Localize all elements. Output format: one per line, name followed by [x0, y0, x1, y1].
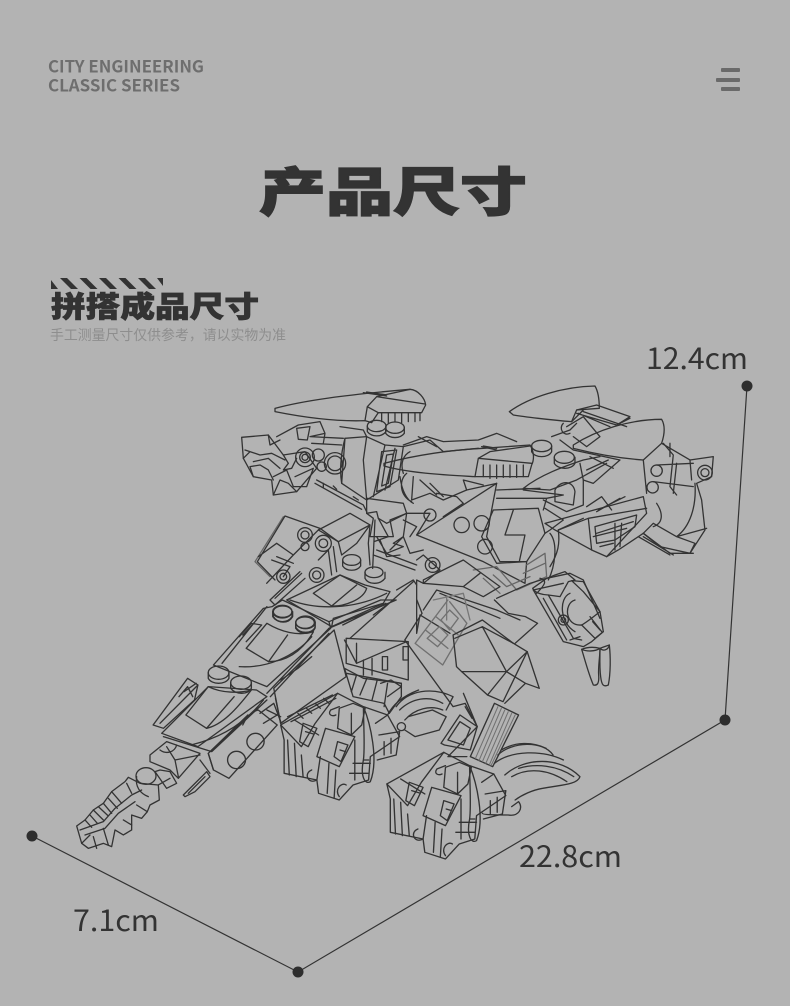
section note: 手工测量尺寸仅供参考，请以实物为准 — [50, 325, 286, 345]
lower body: wedges and legs — [153, 600, 580, 859]
right body block — [545, 497, 693, 567]
center head — [367, 445, 533, 557]
upper body: heads and shoulders — [242, 386, 713, 620]
title: 产品尺寸 — [259, 151, 527, 226]
right heads — [509, 386, 713, 555]
label: length: 22.8cm — [519, 834, 622, 876]
right arm and claws — [533, 572, 610, 686]
series label — [48, 54, 204, 96]
series label: CLASSIC SERIES — [48, 72, 180, 96]
torso blocks — [405, 600, 539, 757]
shoulder panel — [255, 516, 338, 583]
ribbed plate — [470, 703, 519, 767]
icon: menu — [716, 68, 740, 91]
top wedge — [270, 513, 388, 605]
neck plates — [213, 600, 396, 687]
dimension lines — [26, 380, 752, 978]
robot line drawing — [77, 386, 713, 859]
grey window panel — [415, 600, 467, 665]
label: width: 7.1cm — [73, 898, 159, 940]
label: height: 12.4cm — [646, 336, 748, 378]
hip ribs — [381, 680, 453, 737]
left head — [242, 389, 517, 512]
icon: hazard stripes — [51, 278, 163, 289]
section heading: 拼搭成品尺寸 — [51, 284, 259, 326]
studs — [273, 555, 385, 633]
gray center grid — [423, 553, 600, 620]
curved plate — [287, 550, 450, 638]
tail — [77, 742, 210, 848]
shoulder triangle with lightning — [407, 483, 583, 583]
tail ribs and claw — [482, 744, 580, 815]
front leg — [281, 693, 400, 800]
rear leg — [387, 752, 506, 859]
head plates — [153, 666, 267, 752]
series label: CITY ENGINEERING — [48, 54, 204, 78]
left shoulder cluster — [255, 513, 450, 638]
wedges — [208, 628, 408, 778]
